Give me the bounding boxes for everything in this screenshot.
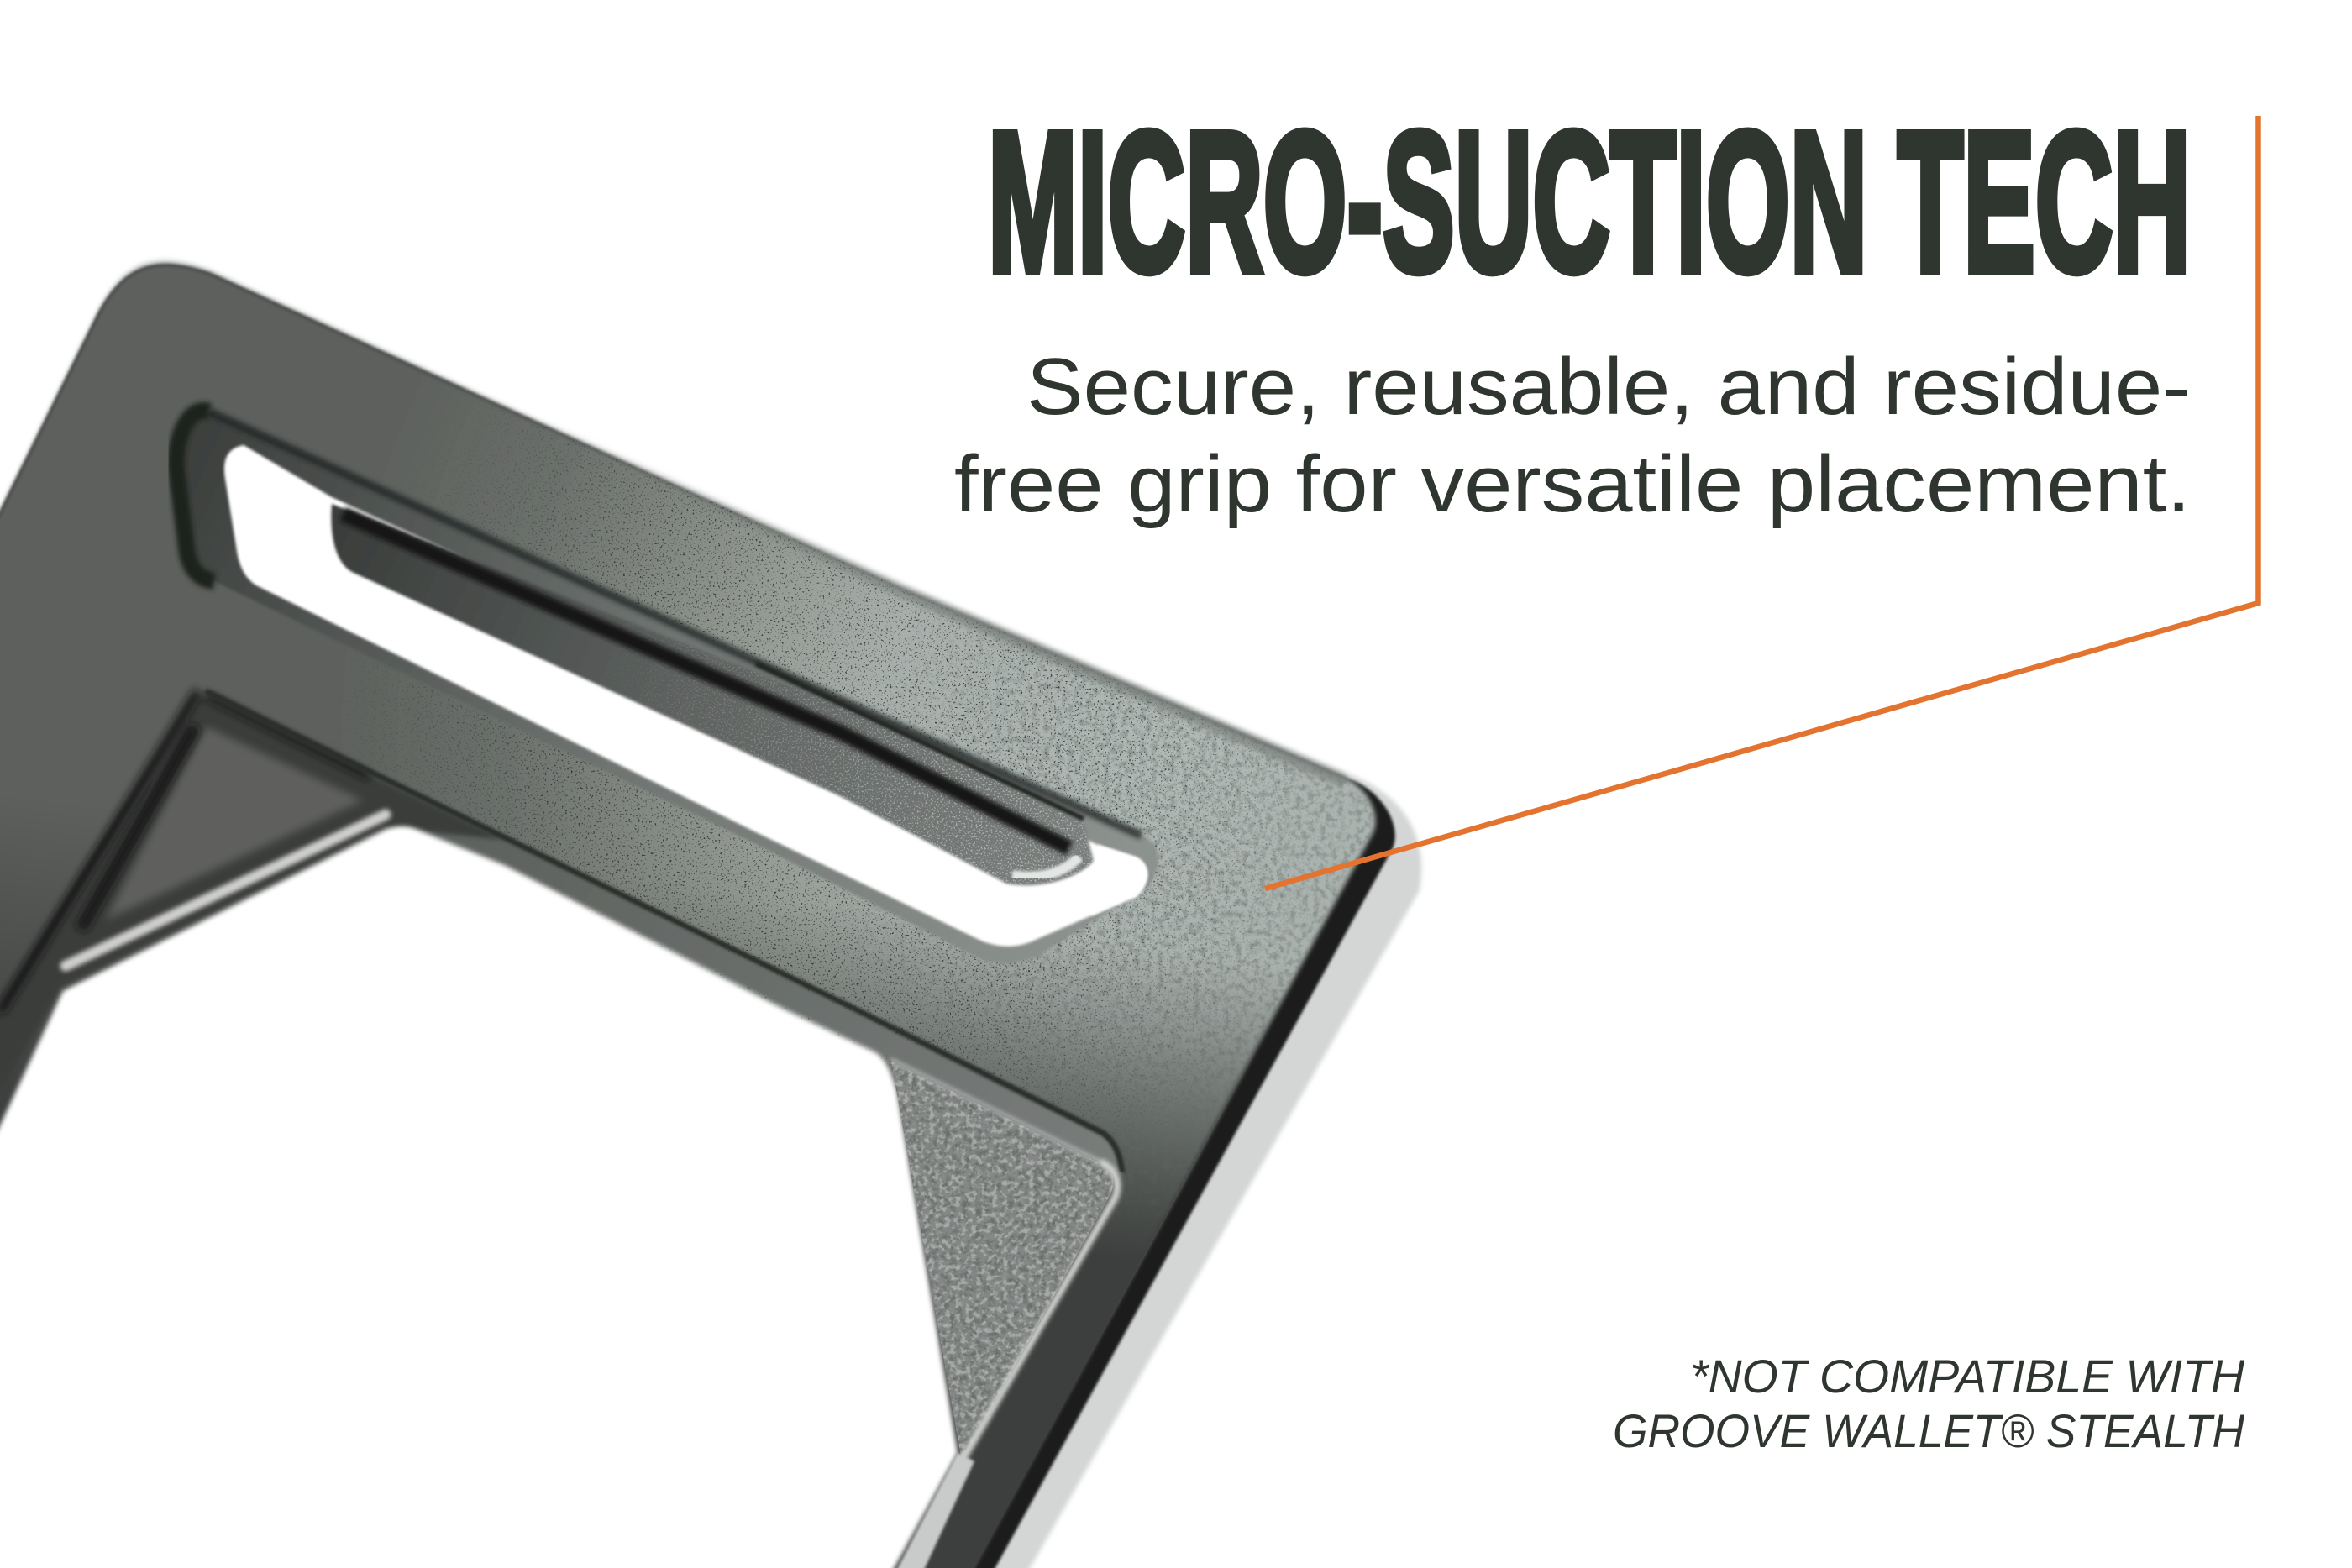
callout line [1265, 116, 2258, 889]
subtitle: free grip for versatile placement. [954, 439, 2191, 529]
subtitle: Secure, reusable, and residue- [1026, 342, 2191, 432]
lower arm bevel [206, 691, 1122, 1176]
footnote [1613, 1350, 2245, 1457]
plate black side band [0, 265, 1395, 1568]
left recess dark surround [0, 693, 504, 1092]
plate outer silver rim [0, 260, 1421, 1568]
left recess black lines [0, 691, 370, 1012]
gusset triangle [891, 1062, 1114, 1456]
inner ledge seen through slot [331, 504, 1109, 899]
gusset bright edges [891, 1060, 1117, 1461]
slot opening [224, 445, 1147, 947]
inner cutout of the plate [0, 826, 958, 1568]
footnote: *NOT COMPATIBLE WITH [1690, 1350, 2245, 1403]
re-open slot beyond ledge end [1067, 845, 1147, 915]
lower silver edge of the arm [892, 1453, 974, 1568]
footnote: GROOVE WALLET® STEALTH [1613, 1404, 2245, 1457]
left recess triangle [106, 726, 363, 920]
recess shadow line [206, 691, 1122, 1172]
left recess highlight strip [66, 815, 386, 966]
plate top surface [0, 265, 1428, 1568]
subtitle [954, 342, 2191, 529]
product photo: metal plate corner [0, 260, 1428, 1568]
recess around the long slot [176, 411, 1158, 963]
